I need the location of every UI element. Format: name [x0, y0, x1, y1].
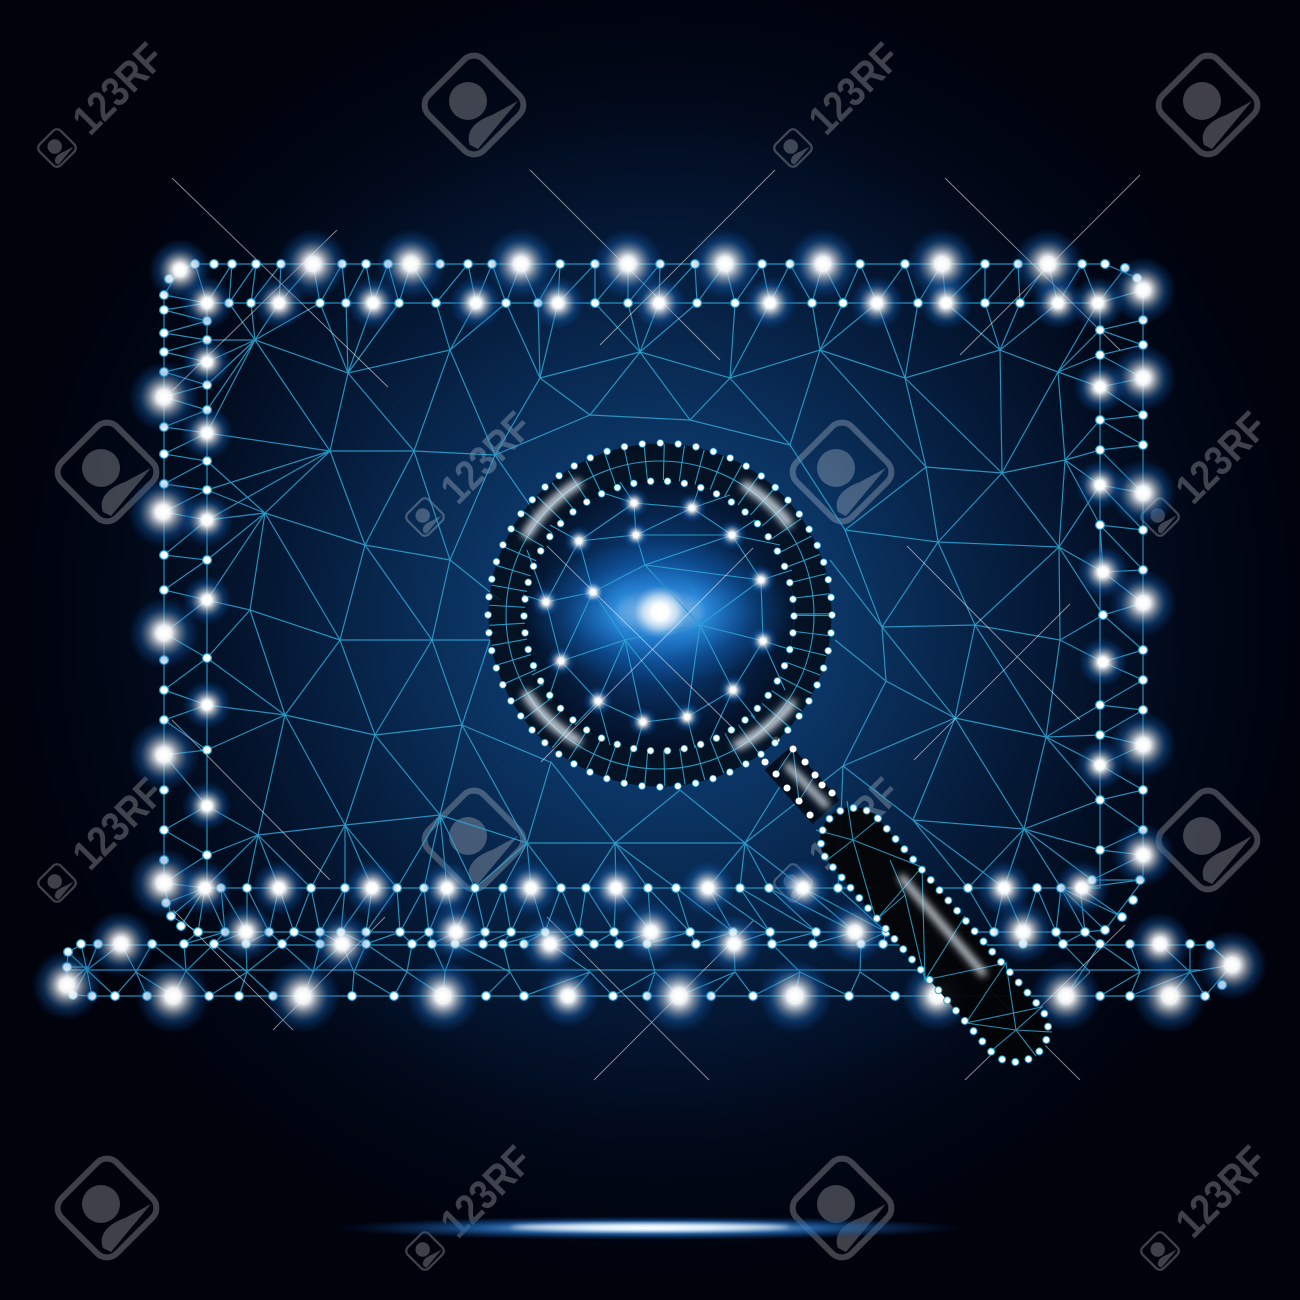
- watermark: upper middle: [404, 403, 541, 538]
- lens highlight arcs: [527, 484, 791, 745]
- floor light reflection: [330, 1216, 970, 1240]
- watermark: upper middle: 123RF: [431, 403, 541, 512]
- handle highlights: [788, 766, 983, 973]
- lens dark ring: [507, 462, 813, 768]
- watermark: upper right: [1139, 403, 1276, 538]
- handle grip: [853, 840, 1016, 1030]
- handle mesh: [776, 749, 1052, 1056]
- handle dots white: [821, 808, 1048, 1062]
- laptop node dots: [67, 264, 1232, 996]
- watermark: lower centre: 123RF: [799, 769, 909, 878]
- lens interior: [524, 480, 794, 750]
- sparkle crossing lines: [172, 170, 1140, 1080]
- lens ring dots inner white: [524, 481, 794, 751]
- lens mesh: [506, 461, 814, 769]
- lens ring dots outer: [488, 443, 832, 787]
- laptop mesh lines: [67, 264, 1232, 996]
- neck dots: [765, 740, 832, 815]
- handle dots: [821, 808, 1048, 1062]
- watermark: lower centre: [772, 769, 909, 904]
- watermark: top left: 123RF: [63, 34, 173, 143]
- lens ring dots inner: [524, 481, 794, 751]
- watermark: top left: [36, 34, 173, 169]
- magnifier handle: [776, 749, 1052, 1062]
- watermark: bottom middle: [404, 1137, 541, 1272]
- watermark: upper right: 123RF: [1166, 403, 1276, 512]
- watermark: lower left: [36, 769, 173, 904]
- magnifier lens: [488, 443, 832, 787]
- lens centre glow: [525, 540, 795, 684]
- sparkle lines over lens: [541, 546, 753, 762]
- watermark: bottom right: [1139, 1137, 1276, 1272]
- watermark: bottom middle: 123RF: [431, 1137, 541, 1246]
- laptop glow lights: [31, 228, 1268, 1034]
- handle neck: [778, 758, 826, 812]
- watermark: bottom right: 123RF: [1166, 1137, 1276, 1246]
- lens inner glows: [531, 488, 778, 737]
- watermark: top centre: [772, 34, 909, 169]
- watermark: top centre: 123RF: [799, 34, 909, 143]
- watermark: lower left: 123RF: [63, 769, 173, 878]
- lens ring dots outer white: [488, 443, 832, 787]
- lens bright core: [620, 572, 700, 652]
